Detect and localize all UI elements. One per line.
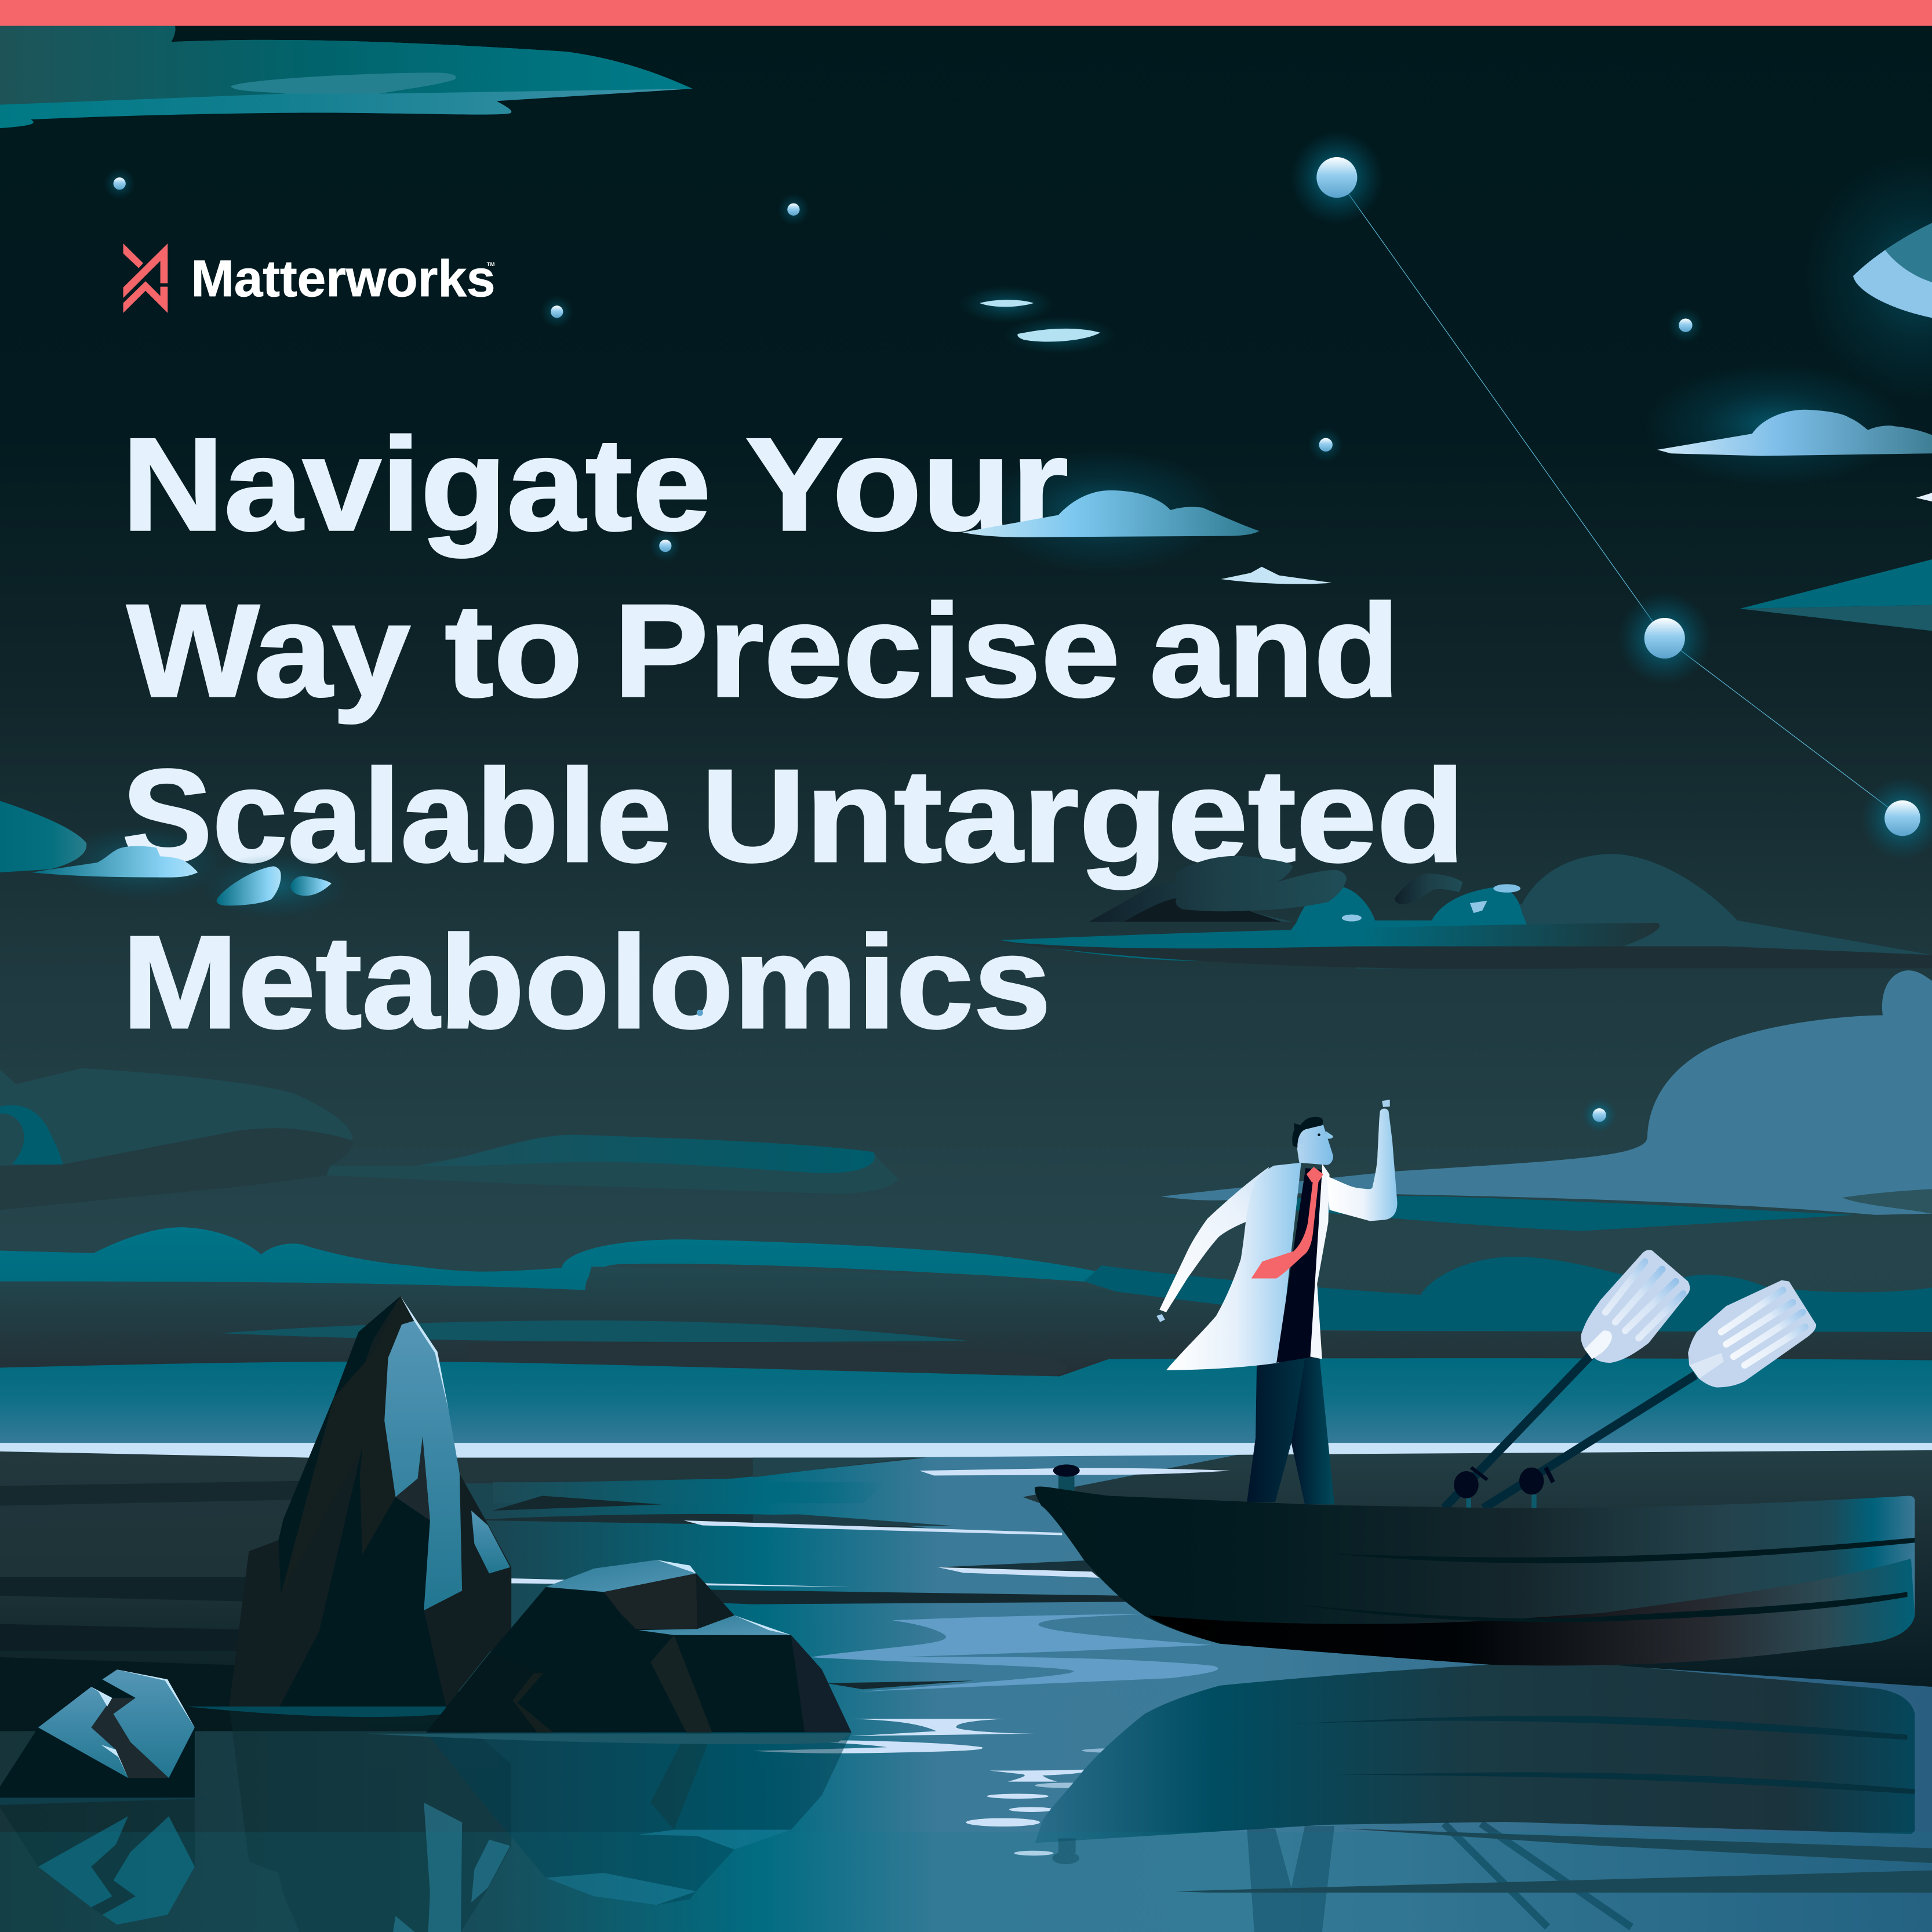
rock: medium boulder — [426, 1560, 852, 1733]
cloud: centre right teal-grey hump — [1355, 854, 1932, 969]
right dark water behind boat — [1023, 1446, 1932, 1687]
background: night sky gradient — [0, 0, 1932, 1367]
glowing node: middle — [1618, 591, 1712, 685]
cloud: faint teal ellipse over dark band — [219, 1320, 967, 1342]
oarlock posts — [1467, 1494, 1537, 1508]
coat right strip — [1310, 1164, 1330, 1359]
hull — [1035, 1487, 1915, 1665]
oar blade: right — [1688, 1280, 1816, 1387]
hair — [1292, 1117, 1323, 1148]
cloud: dark clouds over title line three — [1089, 856, 1520, 922]
reflection: oars — [1444, 1824, 1631, 1927]
cloud: top left teal cloud bank — [0, 26, 693, 128]
reflection: big rock — [229, 1707, 511, 1932]
water sliver at medium rock base — [367, 1734, 852, 1744]
cloud: small left group over title S — [0, 801, 198, 878]
cloud: centre teal and dark band — [1000, 923, 1932, 969]
hull rib: lower — [1295, 1592, 1907, 1622]
reflection: boat hull — [1035, 1665, 1915, 1843]
cloud: over title line one — [962, 490, 1259, 537]
cloud: centre right teal humps — [1282, 886, 1534, 943]
title: Navigate — [122, 411, 711, 558]
eye — [1318, 1133, 1320, 1136]
title: Metabolomics — [122, 909, 1051, 1056]
head — [1297, 1125, 1333, 1165]
sea band above horizon — [0, 1358, 1932, 1448]
water wedge lower right — [1174, 1828, 1932, 1893]
reflection: man legs and boat post — [1052, 1826, 1334, 1932]
trademark: TM — [487, 261, 494, 268]
glowing node: right — [1861, 776, 1932, 860]
cloud: far right big blue cloud — [1160, 970, 1932, 1215]
reflection: boat ribs — [1295, 1716, 1915, 1794]
legs — [1247, 1358, 1334, 1504]
stars — [104, 168, 1703, 1132]
cloud: teal band beneath the blue cloud — [1216, 1196, 1854, 1231]
logo wordmark: Matterworks — [191, 249, 496, 307]
title: Way — [127, 577, 410, 725]
cloud: top right lens — [1853, 223, 1932, 318]
water highlights and swirls — [511, 1458, 1596, 1855]
horizon highlight — [0, 1443, 1932, 1458]
boat — [1035, 1464, 1915, 1665]
rock: small left boulder — [0, 1669, 195, 1798]
cloud: dark tongue above the sea — [468, 1342, 1067, 1376]
cloud: floating drops with glow — [201, 854, 349, 918]
logo: Matterworks — [123, 243, 496, 313]
oarlock: right — [1519, 1467, 1555, 1494]
logo mark — [123, 243, 168, 313]
title: and — [1149, 577, 1400, 725]
glow halos behind clouds — [56, 154, 1932, 900]
cloud: right teal wedge — [1740, 559, 1932, 631]
oar shafts — [1444, 1355, 1695, 1508]
glowing node: top — [1290, 130, 1384, 224]
title: Scalable — [122, 743, 671, 890]
water base — [0, 1448, 1932, 1932]
cloud: dark band above the sea — [0, 1267, 1932, 1377]
left sleeve — [1159, 1167, 1269, 1312]
title: Your — [745, 411, 1068, 558]
water sliver at large rock base — [186, 1707, 446, 1717]
scientist figure — [1156, 1100, 1397, 1504]
cloud: lower left dark cloud bank — [0, 1068, 898, 1210]
lab coat body — [1166, 1163, 1301, 1370]
oarlock: left — [1454, 1467, 1489, 1498]
oar blade: left — [1581, 1250, 1690, 1363]
top accent bar — [0, 0, 1932, 26]
keel band — [1148, 1559, 1915, 1665]
left dark water stripes — [0, 1448, 926, 1731]
title: to — [445, 577, 583, 725]
constellation lines — [1337, 177, 1902, 818]
cloud: long teal band across the middle — [0, 1227, 1158, 1290]
right arm — [1327, 1109, 1397, 1221]
dark shirt — [1276, 1168, 1322, 1363]
boat post — [1058, 1476, 1075, 1492]
title — [122, 411, 1465, 1056]
left hand — [1156, 1314, 1165, 1322]
hull rib: upper — [1332, 1538, 1915, 1563]
tie — [1251, 1167, 1323, 1279]
nose — [1326, 1131, 1333, 1138]
cloud: right teal band behind the oars — [1085, 1257, 1932, 1333]
cloud: dark sliver at right edge — [1842, 1189, 1932, 1214]
cloud: right upper cloud — [1657, 410, 1932, 456]
water reflection band at bottom — [0, 1832, 1932, 1932]
rock: large spire — [229, 1296, 511, 1707]
water sliver at small rock — [0, 1798, 229, 1805]
oars — [1444, 1250, 1816, 1508]
reflection: medium rock — [426, 1733, 852, 1905]
post ball — [1053, 1464, 1080, 1477]
title: Precise — [614, 577, 1120, 725]
ear — [1297, 1134, 1304, 1144]
title: Untargeted — [701, 743, 1465, 890]
fingertip — [1382, 1100, 1390, 1107]
cloud: small pale slivers — [980, 300, 1932, 584]
reflection: small rock — [0, 1796, 195, 1924]
